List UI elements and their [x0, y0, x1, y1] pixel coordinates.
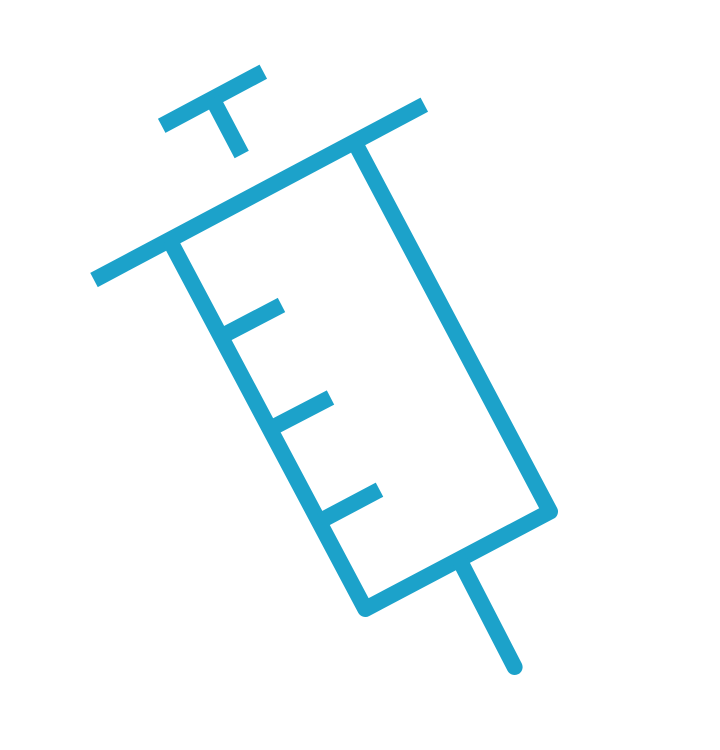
- graduation marks: [222, 305, 380, 521]
- needle: [460, 560, 515, 667]
- plunger handle: [162, 72, 263, 154]
- syringe barrel: [170, 142, 550, 609]
- barrel flange: [94, 105, 424, 280]
